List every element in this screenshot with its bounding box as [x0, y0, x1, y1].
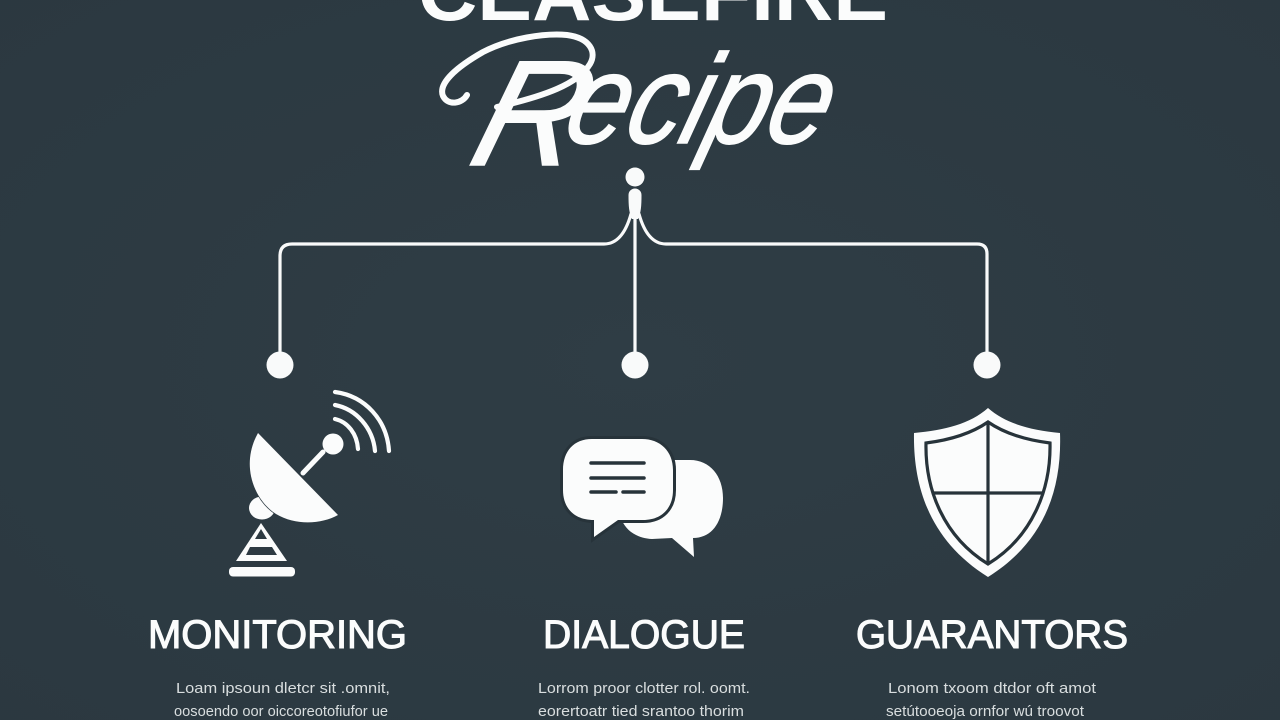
- node: monitoring: [266, 352, 294, 378]
- icon: shield: [914, 408, 1060, 577]
- title: Recipe script: R: [456, 30, 613, 197]
- text block: monitoring: [174, 680, 390, 720]
- heading: MONITORING: MONITORING: [148, 613, 407, 657]
- text block: guarantors: setútooeoja ornfor wú troovot: [886, 703, 1085, 720]
- icon: satellite dish: [229, 392, 389, 576]
- text block: guarantors: [886, 680, 1097, 720]
- node: dialogue: [622, 352, 648, 378]
- text block: dialogue: [538, 680, 750, 720]
- text block: dialogue: Lorrom proor clotter rol. oomt.: [538, 680, 750, 697]
- text block: guarantors: Lonom txoom dtdor oft amot: [888, 680, 1097, 697]
- icon: speech bubbles: [563, 439, 723, 557]
- text block: monitoring: oosoendo oor oiccoreotofiufor ue: [174, 703, 388, 720]
- connector tree: [266, 168, 1000, 378]
- heading: GUARANTORS: GUARANTORS: [856, 613, 1128, 657]
- title: Recipe script: [442, 29, 855, 197]
- text block: monitoring: Loam ipsoun dletcr sit .omnit,: [176, 680, 390, 697]
- text block: dialogue: eorertoatr tied srantoo thorim: [538, 703, 744, 720]
- title: Recipe script: ecipe: [552, 29, 855, 170]
- node: guarantors: [974, 352, 1000, 378]
- heading: DIALOGUE: DIALOGUE: [543, 613, 745, 657]
